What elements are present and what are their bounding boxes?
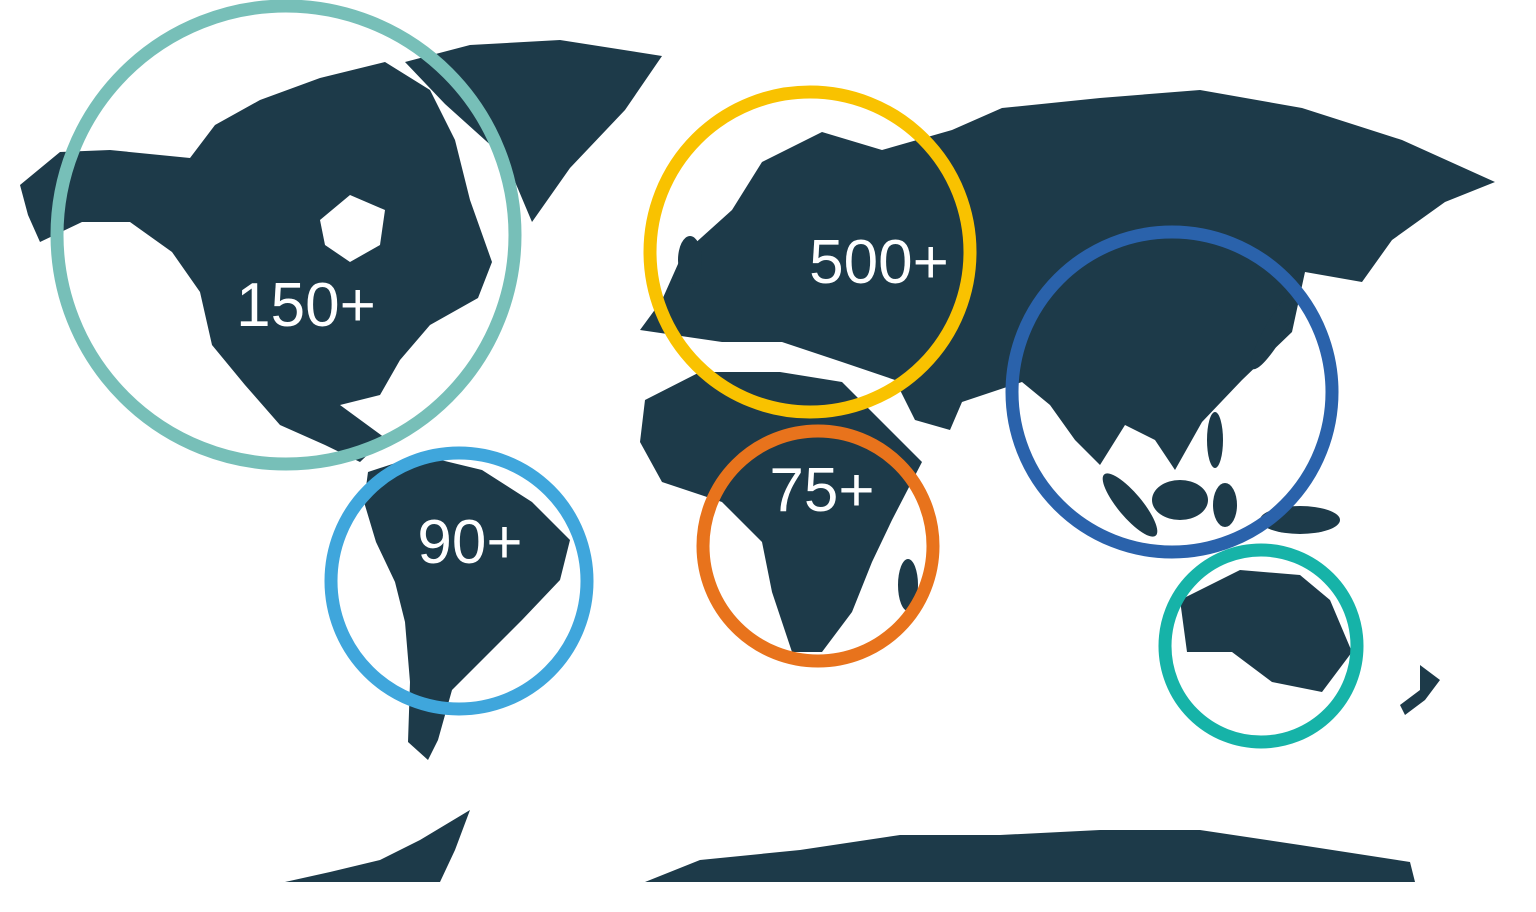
continent: North America xyxy=(20,62,492,462)
circle: North America xyxy=(57,6,515,464)
continent: Africa xyxy=(640,372,922,652)
label: 150+: 150+ xyxy=(236,271,376,340)
circle: Australia xyxy=(1165,550,1357,742)
label: 500+: 500+ xyxy=(809,228,949,297)
islands: Southeast Asia xyxy=(1152,480,1208,520)
circle: Africa xyxy=(703,431,933,661)
island: Britain xyxy=(678,236,702,284)
island: Madagascar xyxy=(898,559,918,611)
continent: Eurasia xyxy=(640,90,1495,470)
circle: Europe xyxy=(650,92,970,412)
island: New Zealand xyxy=(1400,665,1440,715)
circle: Asia xyxy=(1012,232,1332,552)
island: Japan xyxy=(1244,286,1306,374)
continent: Greenland xyxy=(405,40,662,222)
label: 90+: 90+ xyxy=(417,508,523,577)
continent: South America xyxy=(364,455,570,760)
label: 75+: 75+ xyxy=(769,456,875,525)
circle: South America xyxy=(331,453,587,709)
water: Hudson Bay xyxy=(320,195,385,262)
island: Antarctic peninsula xyxy=(285,810,470,882)
continent: Australia xyxy=(1180,570,1352,692)
continent: Antarctica xyxy=(645,830,1415,882)
